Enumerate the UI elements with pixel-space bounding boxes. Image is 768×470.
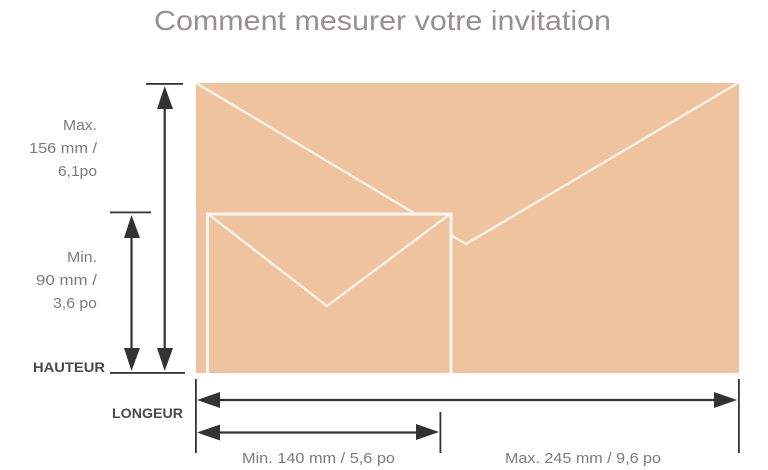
width arrow: min [197,412,441,453]
label: min height: Min. [67,249,97,266]
label: hauteur: HAUTEUR [33,359,105,375]
label: max width: Max. 245 mm / 9,6 po [505,450,661,467]
label: min height: 3,6 po [53,295,97,312]
title: Comment mesurer votre invitation [154,5,611,36]
height arrow: max [146,83,183,371]
height arrow: min [110,212,151,371]
small envelope [196,214,739,377]
label: min width: Min. 140 mm / 5,6 po [242,450,395,467]
width arrow: max [195,379,740,453]
label: max height [29,117,98,180]
label: max height: 156 mm / [29,140,98,157]
label: min height: 90 mm / [36,272,98,289]
label: longeur: LONGEUR [112,405,183,421]
height baseline [110,372,185,374]
label: min height [36,249,98,312]
label: max height: 6,1po [58,163,97,180]
large envelope [196,83,739,373]
label: max height: Max. [63,117,97,134]
